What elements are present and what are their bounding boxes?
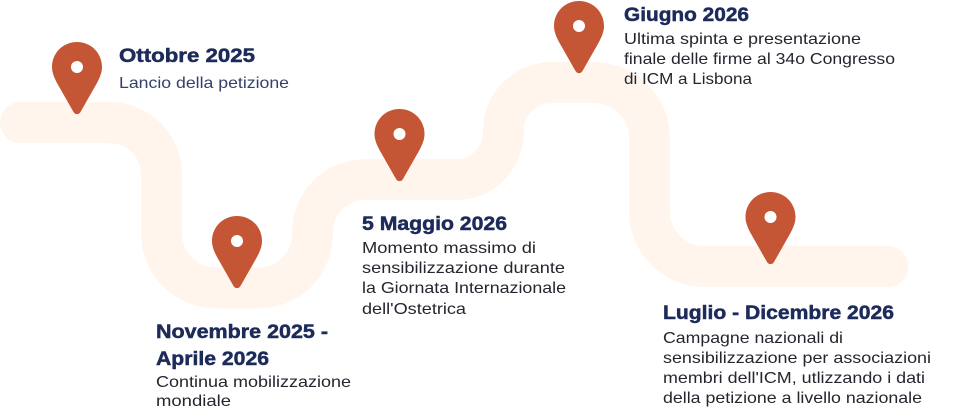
text: Campagne nazionali di sensibilizzazione: Campagne nazionali di — [663, 330, 843, 347]
text: Ultima spinta e presentazione — [624, 31, 895, 88]
text: Campagne nazionali di sensibilizzazione: della petizione a livello nazionale — [663, 390, 922, 407]
text: Ultima spinta e presentazione: finale delle firme al 34o Congresso — [624, 51, 895, 68]
text: Ultima spinta e presentazione: di ICM a Lisbona — [624, 71, 752, 88]
heading: Novembre 2025 - Aprile 2026: Novembre 2025 - — [156, 321, 328, 343]
text: Ultima spinta e presentazione: Ultima spinta e presentazione — [624, 31, 861, 48]
milestone: 5 Maggio 2026 — [362, 109, 566, 318]
milestone: Luglio - Dicembre 2026 — [663, 192, 931, 407]
heading: Giugno 2026: Giugno 2026 — [624, 4, 749, 26]
text: Momento massimo di sensibilizzazione: dell'Ostetrica — [362, 301, 466, 318]
text: Lancio della petizione: Lancio della petizione — [119, 75, 289, 92]
heading: Novembre 2025 - Aprile 2026: Aprile 2026 — [156, 348, 269, 370]
text: Momento massimo di sensibilizzazione: sensibilizzazione durante — [362, 260, 565, 277]
heading: Luglio - Dicembre 2026: Luglio - Dicembre 2026 — [663, 302, 894, 324]
winding road path — [20, 82, 888, 288]
milestone: Novembre 2025 - Aprile 2026 — [156, 216, 351, 410]
icon: map pin 1 — [52, 42, 102, 114]
text: Momento massimo di sensibilizzazione: la Giornata Internazionale — [362, 280, 566, 297]
icon: map pin 5 — [746, 192, 796, 264]
icon: map pin 3 — [374, 109, 424, 181]
text: Continua mobilizzazione mondiale — [156, 374, 351, 410]
text: Continua mobilizzazione mondiale: mondiale — [156, 393, 231, 410]
icon: map pin 2 — [212, 216, 262, 288]
heading: Novembre 2025 - Aprile 2026 — [156, 321, 328, 370]
heading: Ottobre 2025: Ottobre 2025 — [119, 45, 255, 67]
text: Momento massimo di sensibilizzazione: Momento massimo di — [362, 240, 536, 257]
heading: 5 Maggio 2026: 5 Maggio 2026 — [362, 213, 507, 235]
text: Campagne nazionali di sensibilizzazione — [663, 330, 931, 407]
text: Campagne nazionali di sensibilizzazione: membri dell'ICM, utlizzando i dati — [663, 370, 925, 387]
icon: map pin 4 — [554, 1, 604, 73]
milestone: Giugno 2026 — [554, 1, 895, 88]
text: Continua mobilizzazione mondiale: Continua mobilizzazione — [156, 374, 351, 391]
milestone: Ottobre 2025 — [52, 42, 289, 114]
text: Campagne nazionali di sensibilizzazione: sensibilizzazione per associazioni — [663, 350, 931, 367]
text: Momento massimo di sensibilizzazione — [362, 240, 566, 318]
